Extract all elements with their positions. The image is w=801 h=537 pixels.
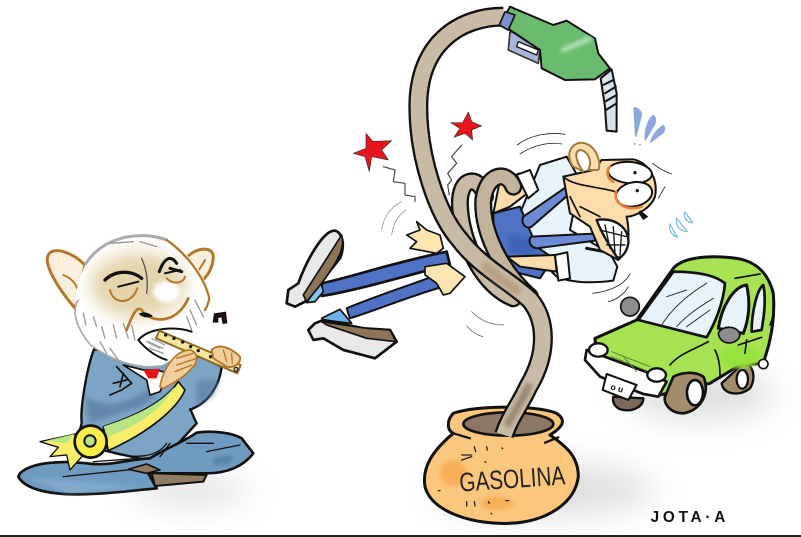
sash with medal [40, 382, 185, 470]
head [75, 236, 209, 367]
shirt and tie [110, 365, 168, 395]
sweat drops [633, 107, 665, 146]
crossed legs [18, 432, 253, 494]
flute [156, 331, 241, 373]
bottom border line [0, 535, 801, 537]
hose [418, 17, 543, 435]
fuel nozzle [499, 7, 617, 132]
motion lines [382, 133, 672, 337]
ears [47, 249, 213, 308]
music note [213, 312, 227, 324]
signature: JOTA·A [651, 509, 725, 526]
pain squiggles [383, 145, 462, 202]
man: back hand and torso [407, 157, 617, 295]
car [585, 257, 774, 413]
man: legs and shoes [287, 231, 450, 358]
fuel hose, nozzle and man [287, 7, 693, 435]
licence plate text: o u [609, 382, 625, 395]
character: seated president playing flute [18, 236, 253, 494]
ground shadows [130, 370, 775, 516]
hands [160, 346, 240, 388]
pot and car [424, 257, 774, 526]
stars [353, 112, 482, 172]
pot label: GASOLINA [458, 460, 566, 498]
clay pot [424, 407, 578, 523]
man: head [563, 143, 656, 260]
suit body [18, 349, 253, 494]
